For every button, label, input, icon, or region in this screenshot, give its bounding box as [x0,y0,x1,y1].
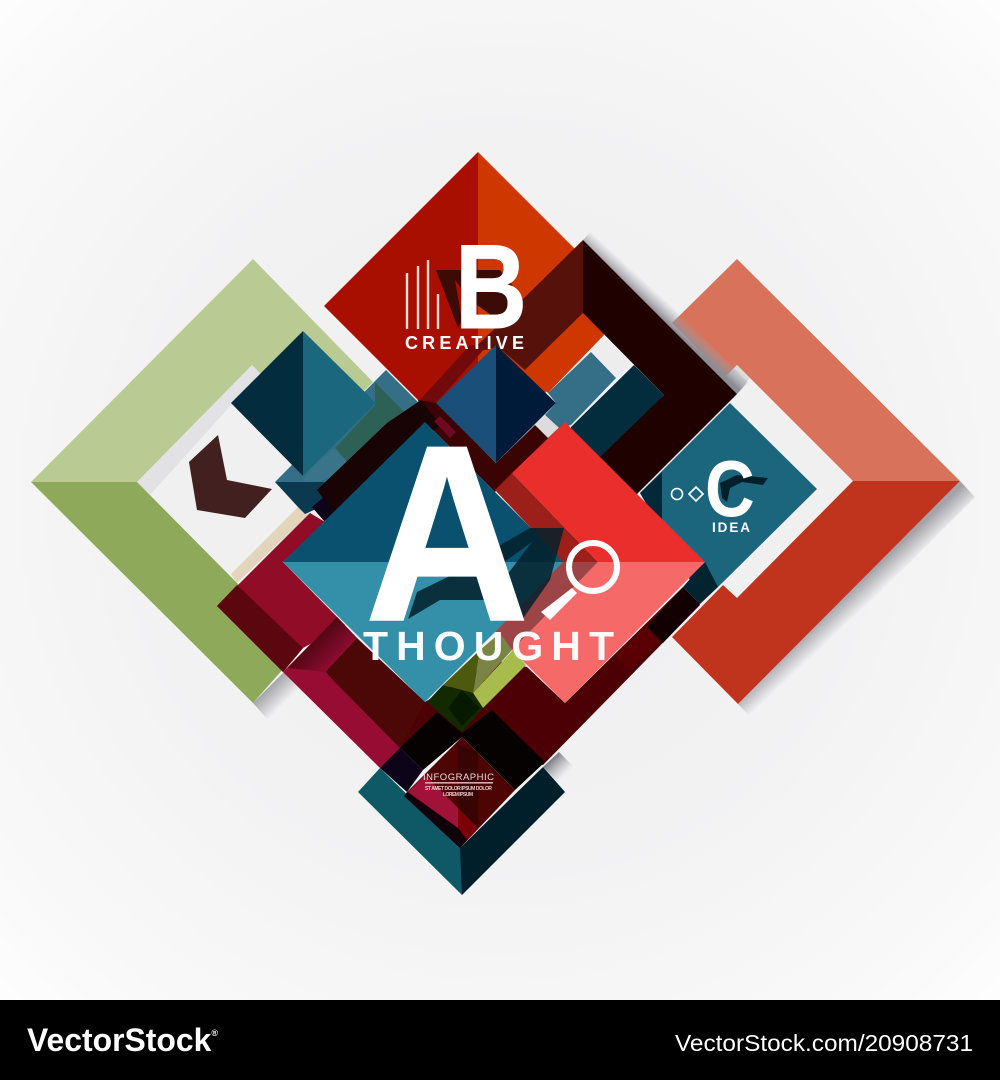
icon: magnifying glass [541,543,617,620]
icon: vertical lines [407,260,438,329]
heading: THOUGHT: THOUGHT [363,623,614,669]
letter B: B [455,220,527,354]
panel: dark bracket [583,228,748,504]
panel: blue pyramid [436,345,556,463]
icon: B shadow [436,270,520,328]
panel: teal pyramid [231,331,407,482]
icon: C swoosh shadow [720,475,768,502]
panel: dark band lower right [400,587,700,765]
label: IDEA: IDEA [712,520,750,535]
panel: blue-grey band behind [275,370,418,514]
panel: creative diamond B [324,152,632,460]
panel: bottom diamond [358,710,574,895]
footer band [0,1000,1000,1080]
panel: main teal diamond A [283,422,565,702]
label: CREATIVE: CREATIVE [405,333,524,353]
text block: infographic caption: INFOGRAPHIC [423,772,494,783]
panel: green frame [31,259,373,720]
footer logo: ® [211,1028,218,1038]
icon: A long shadow [408,528,564,620]
text block: infographic caption: LOREM IPSUM [443,792,473,798]
panel: lime overlap strip [427,633,526,732]
panel: right strips [525,313,664,480]
text block: infographic caption: ST AMET DOLOR IPSUM DOLOR [425,786,492,792]
panel: crimson shapes [217,513,437,768]
footer logo: VectorStock [27,1022,212,1058]
letter C: C [705,443,755,533]
letter A: A [364,393,529,673]
panel: dark central backing [312,400,565,522]
icon: brown chevron [189,435,272,518]
panel: main red diamond [495,422,705,703]
panel: orange frame [672,259,975,720]
text block: infographic caption [423,772,494,798]
brown overlap band [498,240,583,370]
panel: idea diamond C [640,403,817,604]
icon: small circle and diamond [672,487,703,501]
footer url: VectorStock.com/20908731 [675,1030,973,1056]
